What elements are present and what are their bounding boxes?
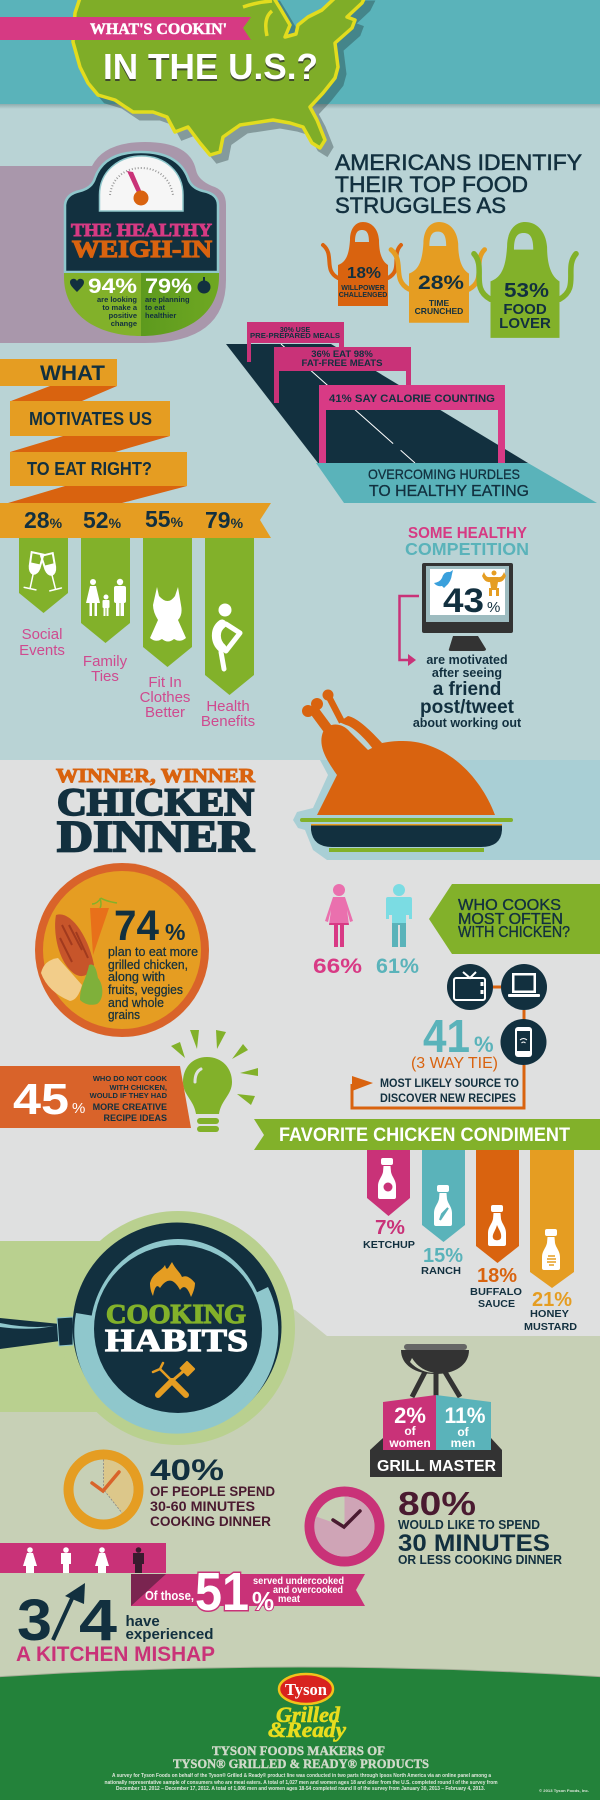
motivator: health benefits [201,538,255,730]
background: shadow under teal band [0,104,600,109]
icon group: tv laptop phone [352,964,547,1108]
callout: who cooks most often [429,884,600,954]
text: 80%: 30 MINUTES [398,1530,550,1557]
ribbon heading: what motivates us to eat right: TO EAT RIGHT? [27,459,152,479]
hurdle: 30%: PRE-PREPARED MEALS [250,333,340,340]
percent band: 55% [145,506,184,532]
stand: grill master: GRILL MASTER [377,1458,496,1475]
circle: 74% grilled chicken: plan to eat more [108,944,198,959]
map of the United States [73,0,373,162]
apron: food lover [474,222,576,338]
motivator: fit in clothes better: Clothes [140,689,190,706]
ribbon heading: what motivates us to eat right [0,359,187,503]
apron: willpower challenged: 18% [347,265,381,282]
heading: winner winner chicken dinner [56,765,256,861]
illustration: food [41,898,117,1005]
motivator: health benefits: Benefits [201,713,255,730]
callout: who cooks most often: MOST OFTEN [458,911,563,928]
monitor: 43%: % [487,599,500,616]
footer copyright: © 2013 Tyson Foods, Inc. [539,1789,589,1793]
motivator: fit in clothes better: Fit In [148,674,182,691]
apron: willpower challenged: WILLPOWER [341,285,385,292]
motivator: health benefits: Health [206,698,250,715]
stat: 41% three way tie: MOST LIKELY SOURCE TO [380,1078,519,1090]
footer heading [173,1743,429,1771]
apron: food lover: LOVER [499,315,551,332]
title: in the U.S.?: IN THE U.S.? [103,48,318,89]
icon: dress [150,587,186,642]
condiment: buffalo sauce: SAUCE [478,1298,515,1310]
text: 80%: WOULD LIKE TO SPEND [398,1517,540,1532]
percent band: 52% [83,507,122,533]
hurdle: 36%: 36% EAT 98% [311,349,373,360]
stat: 41% three way tie [380,1010,519,1105]
scale dial [100,156,183,211]
banner: 45% creative recipe ideas: WITH CHICKEN, [110,1083,167,1092]
apron: time crunched: CRUNCHED [415,306,463,316]
stand: grill master: 11% [444,1403,486,1428]
icon: family [86,579,126,616]
banner: 45% creative recipe ideas: MORE CREATIVE [93,1102,167,1112]
stand: grill master: of [404,1424,417,1438]
circle: 74% grilled chicken: and whole [108,995,164,1010]
motivator: fit in clothes better [140,538,192,721]
stats: 94% and 79%: to eat [145,303,166,312]
text: motivated after seeing a friend post: are motivated [426,653,508,667]
percent band: 79% [205,507,244,533]
icon: tv [454,972,485,1000]
road base caption: TO HEALTHY EATING [369,483,529,500]
apron: food lover: 53% [504,280,549,302]
condiment: ketchup [363,1150,415,1251]
text: motivated after seeing a friend post [413,653,522,730]
condiment: buffalo sauce: BUFFALO [470,1286,522,1298]
text: 80%: OR LESS COOKING DINNER [398,1552,563,1567]
percent band [0,503,271,538]
text: 40%: OF PEOPLE SPEND [150,1483,275,1499]
heading: food struggles: STRUGGLES AS [335,193,506,218]
heading: cooking habits: COOKING [106,1299,246,1329]
stat: 3/4 kitchen mishap [16,1583,215,1666]
condiment: ketchup: 7% [375,1217,405,1239]
condiment: ketchup: KETCHUP [363,1239,415,1251]
banner: favorite chicken condiment [254,1119,600,1150]
text: motivated after seeing a friend post: a friend [433,679,501,700]
ribbon: people [0,1543,166,1573]
panel: cooking habits pan [0,1211,295,1445]
condiment: buffalo sauce: 18% [477,1265,517,1287]
illustration: roast turkey [300,690,513,852]
heading: winner winner chicken dinner: CHICKEN [57,781,254,824]
text: 40% [150,1454,275,1529]
ribbon: of those 51%: served undercooked [253,1575,344,1587]
motivator: social events: Social [22,626,62,643]
ribbon: of those 51% [131,1562,365,1622]
heading: food struggles: AMERICANS IDENTIFY [335,150,582,175]
pan handle [0,1317,73,1349]
banner: 45% creative recipe ideas: WHO DO NOT COOK [93,1074,168,1083]
ribbon: of those 51%: and overcooked [273,1584,343,1596]
hurdle: 36%: FAT-FREE MEATS [302,358,382,369]
footer fine print: nationally representative sample of consumers who are meat eaters. A total of 1,027 men and women ages 18 and older from the U.S. completed round I of the survey from [104,1780,498,1786]
ribbon: of those 51%: meat [278,1593,300,1605]
banner: 45% creative recipe ideas: WOULD IF THEY HAD [90,1091,168,1100]
circle: 74% grilled chicken: grilled chicken, [108,957,188,972]
stat: 3/4 kitchen mishap: experienced [126,1626,214,1643]
motivator: social events: Events [19,642,65,659]
icon: champagne glasses [24,552,61,591]
apron: food lover: FOOD [503,301,547,318]
logo: Grilled and Ready: &Ready [268,1717,346,1742]
stat: 3/4 kitchen mishap: 4 [79,1588,117,1653]
ribbon heading: what motivates us to eat right: MOTIVATES US [29,409,152,429]
heading: the healthy weigh-in [71,220,213,263]
heading: some healthy competition [405,525,529,559]
stat: 3/4 kitchen mishap: A KITCHEN MISHAP [16,1643,215,1666]
banner: 45% creative recipe ideas: 45 [13,1075,69,1124]
icon: heart [70,279,84,292]
stand: grill master: of [457,1425,470,1439]
text: 40%: 40% [150,1454,224,1487]
stat: 41% three way tie: (3 WAY TIE) [411,1055,498,1072]
hurdle: 41%: 41% SAY CALORIE COUNTING [329,393,495,405]
monitor: 43%: 43 [443,582,484,620]
banner: 45% creative recipe ideas: RECIPE IDEAS [103,1113,167,1123]
icon: light bulb [171,1030,258,1132]
icon: clock 80% [304,1486,384,1566]
condiment: honey mustard: HONEY [530,1308,569,1320]
background: gray chicken section [0,760,600,1336]
icon: phone [515,1027,532,1057]
heading: cooking habits [105,1299,248,1358]
text: motivated after seeing a friend post: after seeing [432,666,502,680]
icon: laptop [508,973,540,997]
ribbon: of those 51%: % [252,1586,274,1616]
monitor: 43% [422,563,513,651]
apron: willpower challenged [323,222,401,306]
callout: who cooks most often: WHO COOKS [458,897,561,914]
condiment: honey mustard: 21% [532,1289,572,1311]
footer heading: TYSON FOODS MAKERS OF [212,1743,385,1758]
text: motivated after seeing a friend post: about working out [413,716,522,730]
stats: 94% and 79%: to make a [102,303,138,312]
percent band: 28% [24,507,63,533]
background: light green section [0,1240,600,1680]
panel: healthy weigh-in [0,142,226,343]
icon: bottle [542,1229,560,1270]
arrow: monitor to text [400,596,419,666]
icon: flexing figure [482,570,506,596]
stand: grill master [370,1395,502,1477]
icon: apple [198,277,210,294]
circle: 74% grilled chicken: grains [108,1007,140,1022]
icon: woman 66%: 66% [313,955,362,978]
stat: 41% three way tie: DISCOVER NEW RECIPES [380,1093,516,1105]
logo: Tyson [279,1674,333,1704]
logo: Grilled and Ready: Grilled [276,1702,341,1727]
icon: woman 66% [313,884,362,978]
icon: bottle [434,1185,452,1226]
heading: food struggles [335,150,582,218]
text: 80% [398,1485,563,1567]
condiment: honey mustard [524,1150,577,1333]
ribbon: of those 51%: Of those, [145,1588,194,1603]
background: teal block behind turkey [293,760,600,860]
motivator: family ties: Ties [91,668,119,685]
circle: 74% grilled chicken: along with [108,969,165,984]
heading: winner winner chicken dinner: WINNER, WINNER [56,765,256,787]
road with hurdles [226,322,528,463]
stats: 94% and 79%: 79% [145,275,192,298]
heading: the healthy weigh-in: WEIGH-IN [72,237,213,263]
stat: 41% three way tie: 41 [423,1010,470,1062]
heading: some healthy competition: COMPETITION [405,539,529,559]
banner: 45% creative recipe ideas: % [72,1100,85,1117]
hurdle: 30%: 30% USE [280,327,310,334]
icon: bottle [488,1205,506,1246]
apron: time crunched [391,222,485,323]
circle: 74% grilled chicken: fruits, veggies [108,982,183,997]
logo: Tyson: Tyson [285,1680,328,1699]
circle: 74% grilled chicken [35,863,209,1037]
footer heading: TYSON® GRILLED & READY® PRODUCTS [173,1756,429,1771]
hurdle: 41% [319,385,505,463]
heading: food struggles: THEIR TOP FOOD [335,172,528,197]
icon: bird [434,570,453,588]
stat: 3/4 kitchen mishap: have [126,1613,160,1630]
stats: 94% and 79%: 94% [88,275,137,298]
heading: cooking habits: HABITS [105,1322,248,1358]
ribbon heading: what motivates us to eat right: WHAT [40,362,105,385]
condiment: ranch: RANCH [421,1265,461,1277]
heading: the healthy weigh-in: THE HEALTHY [71,220,212,240]
motivator: family ties: Family [83,653,128,670]
stats: 94% and 79%: healthier [145,311,176,320]
icon: stretching figure [216,604,240,669]
text: 40%: 30-60 MINUTES [150,1498,255,1514]
stat: 41% three way tie: % [474,1032,494,1057]
motivator: family ties [81,538,130,685]
title banner: what's cookin': WHAT'S COOKIN' [90,21,227,38]
banner: favorite chicken condiment: FAVORITE CHICKEN CONDIMENT [279,1125,570,1146]
icon: clock 40% [64,1450,144,1530]
icon: grill [401,1344,469,1397]
hurdle: 36% [274,347,411,403]
condiment: ranch [421,1150,465,1277]
stats: 94% and 79% [64,273,219,336]
text: motivated after seeing a friend post: post/tweet [420,697,515,718]
stats: 94% and 79%: positive [109,311,137,320]
stand: grill master: men [451,1436,475,1450]
icon: man 61%: 61% [376,955,419,978]
banner: 45% creative recipe ideas [0,1066,191,1128]
icon: fork and spatula [153,1361,195,1395]
apron: time crunched: 28% [418,273,464,294]
icon: bottle [378,1158,396,1199]
condiment: honey mustard: MUSTARD [524,1321,577,1333]
circle: 74% grilled chicken: % [165,919,185,945]
background: green footer [0,1667,600,1800]
footer fine print: A survey for Tyson Foods on behalf of the Tyson® Grilled & Ready® product line was conducted in two parts through Ipsos North America via an online panel among a [112,1772,491,1779]
motivator: social events [19,538,68,659]
stats: 94% and 79%: are looking [97,295,137,304]
heading: winner winner chicken dinner: DINNER [57,812,255,861]
stand: grill master: 2% [394,1403,426,1428]
text: 80%: 80% [398,1485,476,1522]
text: 40%: COOKING DINNER [150,1513,271,1529]
stats: 94% and 79%: are planning [145,295,190,304]
footer fine print: December 13, 2012 – December 17, 2012. A total of 1,006 men and women ages 18-54 completed round II of the survey from January 30, 2013 – February 4, 2013. [116,1786,486,1792]
circle: 74% grilled chicken: 74 [114,902,159,950]
heading: some healthy competition: SOME HEALTHY [408,525,527,542]
background: top teal band [0,0,600,104]
motivator: fit in clothes better: Better [145,704,185,721]
stats: 94% and 79%: change [111,319,137,328]
title: in the U.S.?: IN THE U.S.? [103,46,318,87]
icon: flame [150,1262,195,1297]
apron: time crunched: TIME [429,298,449,308]
footer fine print [104,1772,498,1792]
icon: man 61% [376,884,419,978]
condiment: buffalo sauce [470,1150,522,1310]
title banner: what's cookin' [0,17,251,40]
road base caption: OVERCOMING HURDLES [368,466,520,482]
stat: 3/4 kitchen mishap: 3 [17,1588,52,1653]
stand: grill master: women [388,1436,431,1450]
condiment: ranch: 15% [423,1245,463,1267]
logo: Grilled and Ready [268,1702,346,1742]
apron: willpower challenged: CHALLENGED [339,292,387,299]
callout: who cooks most often: WITH CHICKEN? [458,924,570,941]
hurdle: 30% [247,322,344,362]
ribbon: of those 51%: 51 [195,1562,249,1622]
road base caption [316,463,597,503]
